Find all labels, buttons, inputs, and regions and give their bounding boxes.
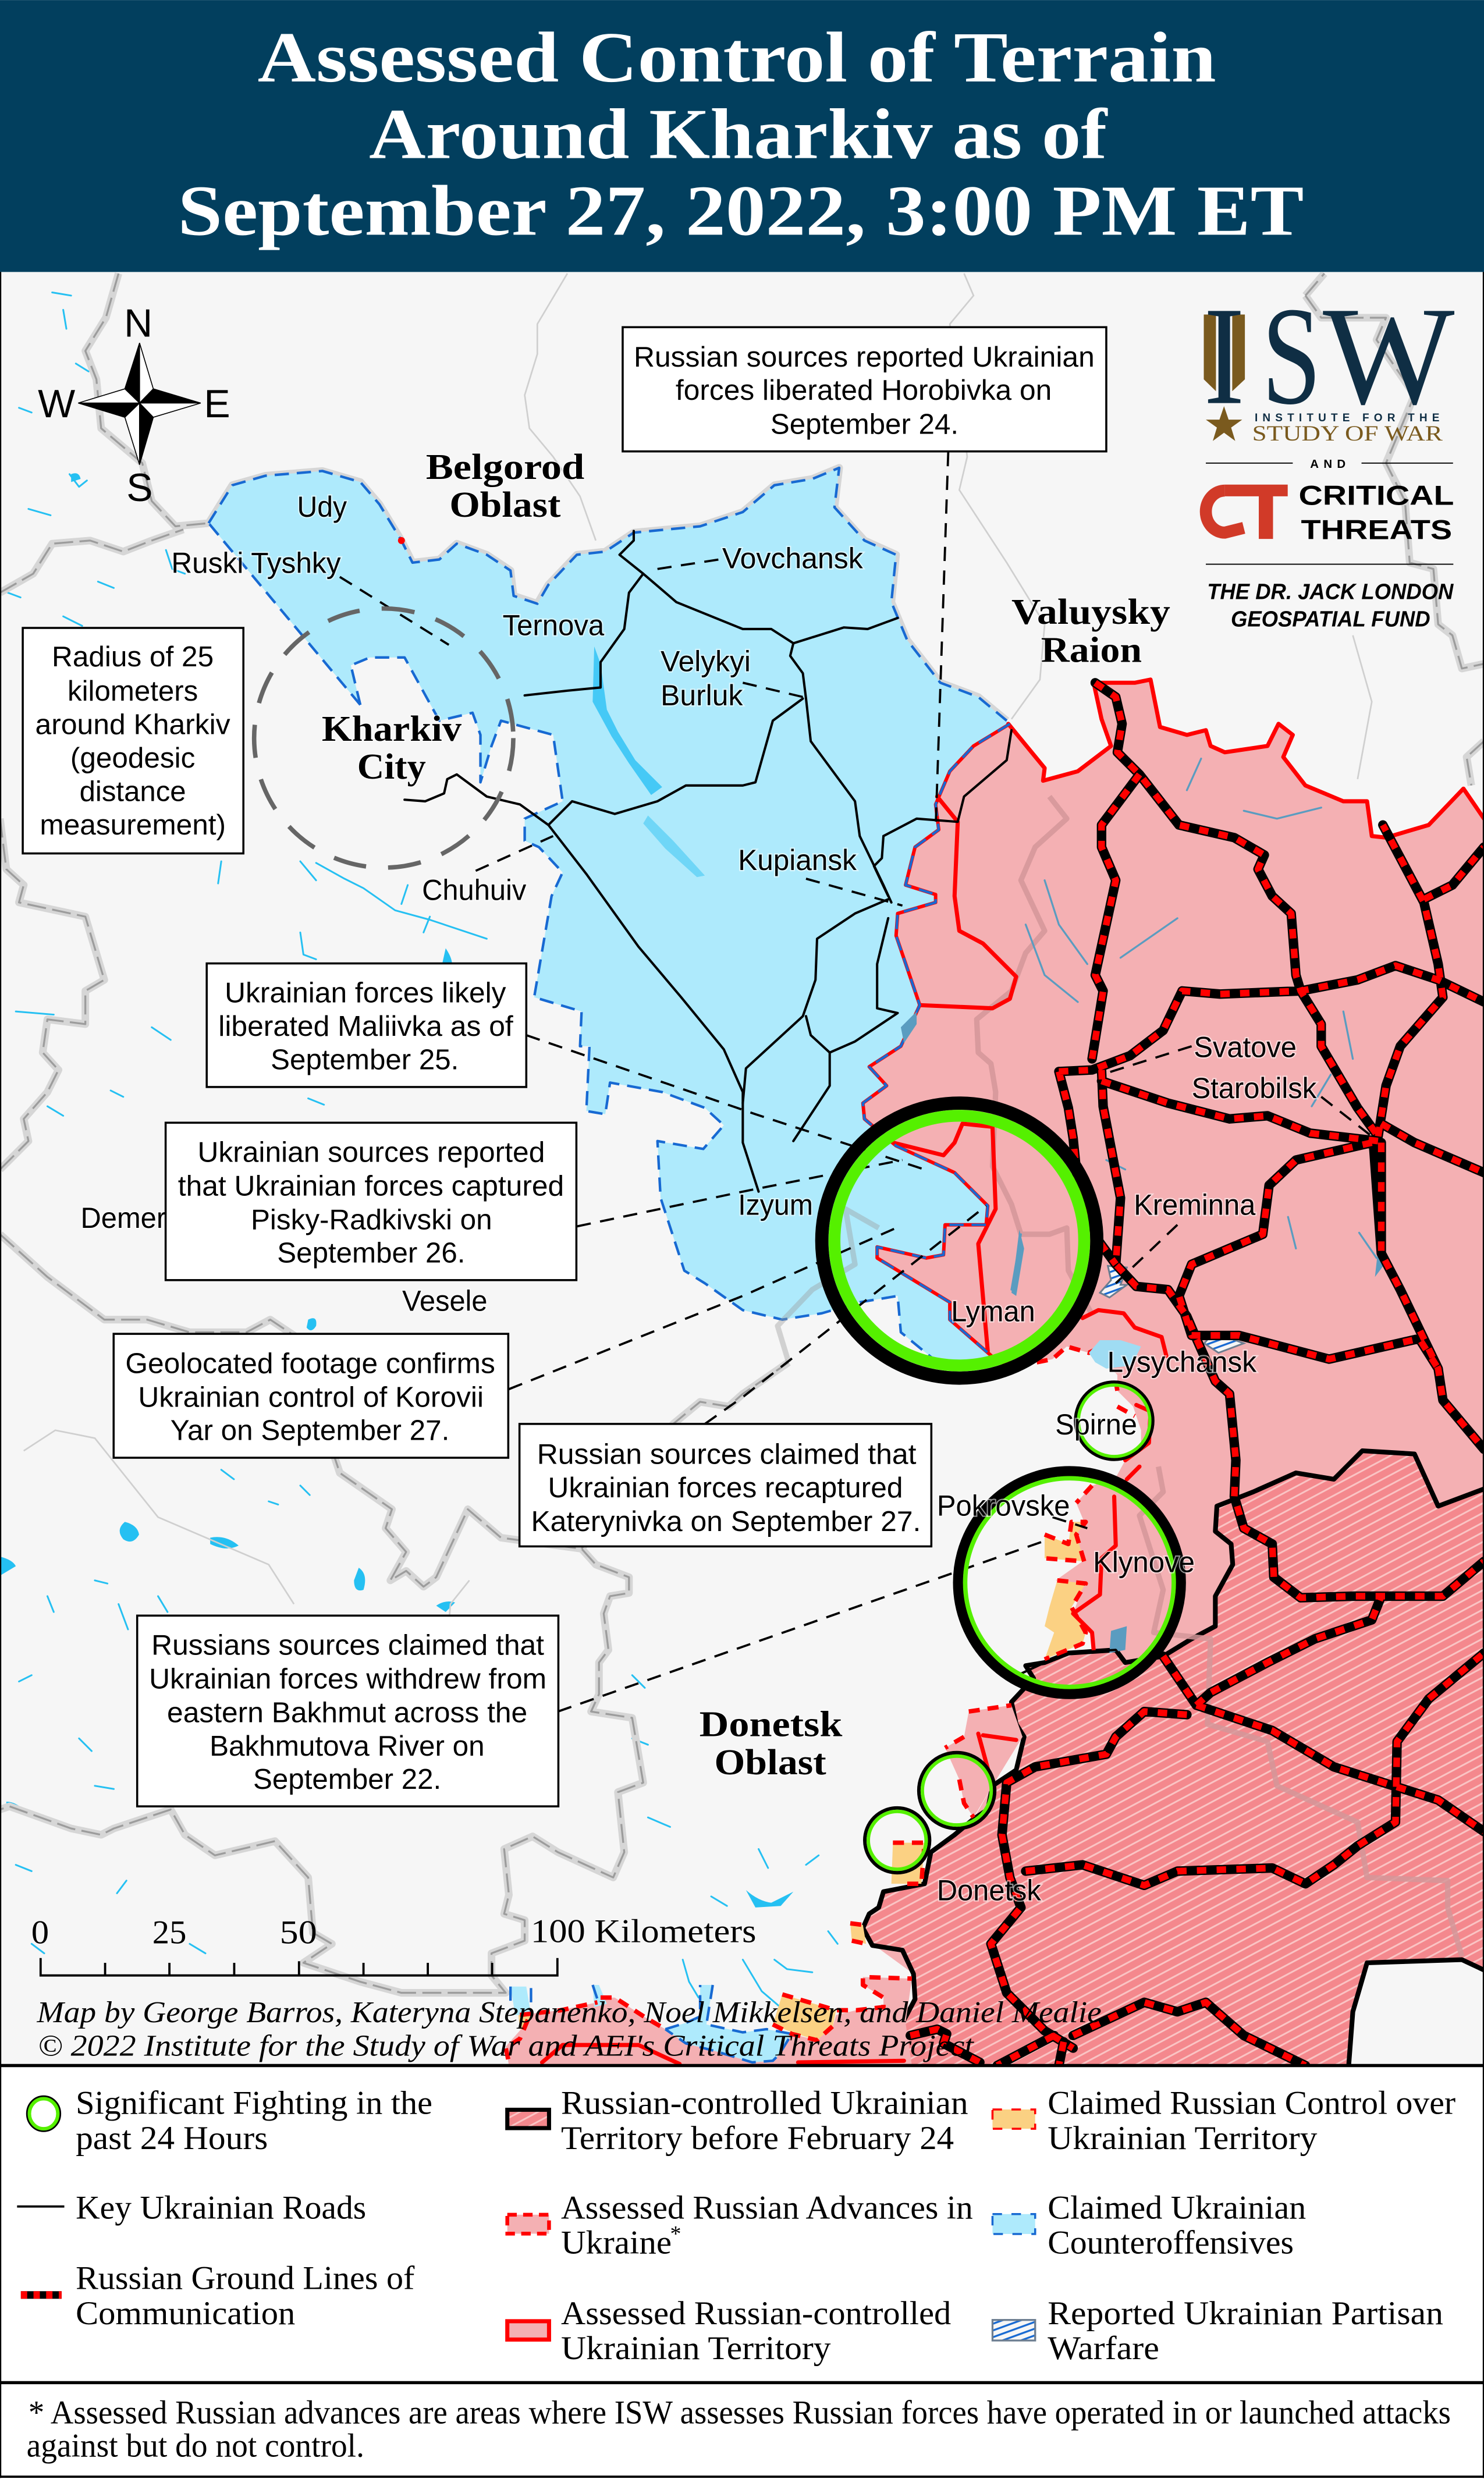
place labels: Starobilsk (1192, 1072, 1317, 1104)
callout: Katerynivka: Katerynivka on September 27. (531, 1506, 921, 1537)
callout: Katerynivka: Russian sources claimed that (537, 1439, 917, 1470)
Jack London fund text (1207, 580, 1454, 632)
callout: Bakhmut: September 22. (253, 1764, 441, 1795)
legend: assessed advances: Assessed Russian Advances in (561, 2189, 973, 2226)
title: Assessed Control of Terrain (258, 17, 1216, 97)
callout: radius around Kharkiv (23, 628, 243, 854)
place labels: Kreminna (1134, 1188, 1255, 1221)
Jack London fund text: GEOSPATIAL FUND (1231, 608, 1430, 632)
key Ukrainian roads (404, 531, 1126, 1675)
footnote: * Assessed Russian advances are areas where ISW assesses Russian forces have operated in or launched attacks (29, 2395, 1451, 2431)
place labels: Spirne (1055, 1408, 1137, 1441)
Critical Threats wordmark: THREATS (1301, 515, 1452, 546)
callout: Horobivka (623, 327, 1106, 452)
legend: claimed Ukrainian counteroffensives (992, 2189, 1306, 2261)
callout: Korovii Yar: Geolocated footage confirms (125, 1348, 495, 1380)
partisan warfare areas (1100, 1266, 1244, 1353)
title (178, 17, 1304, 250)
region labels: Oblast (449, 484, 561, 525)
legend: assessed advances (507, 2189, 973, 2261)
ISW wordmark: I (1203, 279, 1245, 434)
legend: key roads: Key Ukrainian Roads (76, 2189, 366, 2226)
logo: ISW and Critical Threats (1203, 279, 1454, 632)
callout: Pisky-Radkivski: September 26. (277, 1237, 465, 1269)
callout: Pisky-Radkivski (166, 1123, 576, 1280)
ISW wordmark (1203, 279, 1454, 445)
legend: significant fighting (27, 2084, 432, 2157)
callout: radius around Kharkiv: kilometers (68, 676, 198, 707)
ISW wordmark: STUDY OF WAR (1252, 421, 1443, 445)
AND divider: AND (1310, 458, 1345, 471)
compass rose: E (204, 382, 230, 426)
callout: Pisky-Radkivski: Pisky-Radkivski on (251, 1205, 492, 1236)
callout: Maliivka: Ukrainian forces likely (225, 978, 506, 1009)
significant fighting circles (822, 1103, 1181, 1873)
place labels: Kupiansk (738, 844, 857, 876)
place labels: Lysychansk (1107, 1345, 1257, 1378)
scale bar: 50 (280, 1914, 317, 1951)
legend: claimed Russian control: Ukrainian Territory (1048, 2120, 1318, 2157)
territory: assessed Russian-controlled (863, 680, 1484, 2065)
region labels: Valuysky (1011, 591, 1170, 632)
place labels: Klynove (1093, 1546, 1195, 1579)
callout: Maliivka (207, 964, 526, 1087)
white hole southeast (1348, 1960, 1484, 2065)
legend: claimed Ukrainian counteroffensives: Counteroffensives (1048, 2225, 1294, 2261)
legend: claimed Ukrainian counteroffensives: Claimed Ukrainian (1048, 2189, 1306, 2226)
title: Around Kharkiv as of (369, 94, 1108, 174)
legend: significant fighting: past 24 Hours (76, 2120, 268, 2157)
callout: Bakhmut (137, 1615, 558, 1806)
callout: Korovii Yar: Ukrainian control of Korovii (138, 1382, 484, 1413)
region labels: Donetsk (700, 1704, 843, 1745)
place labels (80, 491, 1317, 1907)
compass rose: W (38, 382, 75, 426)
callout: Pisky-Radkivski: that Ukrainian forces captured (178, 1171, 564, 1202)
title: September 27, 2022, 3:00 PM ET (178, 171, 1304, 250)
legend: assessed control: Assessed Russian-controlled (561, 2295, 951, 2332)
region labels: Kharkiv (322, 708, 462, 749)
place labels: Burluk (661, 679, 743, 712)
oblast border through contested area (777, 1209, 879, 1362)
callout: Bakhmut: Ukrainian forces withdrew from (149, 1664, 546, 1695)
internal borders under red (977, 797, 1462, 1956)
map credits: © 2022 Institute for the Study of War and AEI's Critical Threats Project (38, 2030, 975, 2063)
legend: significant fighting: Significant Fighting in the (76, 2084, 432, 2121)
legend: assessed control (507, 2295, 951, 2367)
legend: pre-February 24 territory: Territory before February 24 (561, 2120, 954, 2157)
place labels: Ruski Tyshky (171, 546, 341, 579)
rivers (592, 647, 1384, 1653)
legend: pre-February 24 territory (507, 2084, 968, 2157)
ISW wordmark: INSTITUTE FOR THE (1255, 412, 1439, 424)
place labels: Demer (80, 1202, 166, 1234)
region labels: Belgorod (426, 446, 585, 487)
region labels: City (357, 746, 426, 787)
callout: Bakhmut: Bakhmutova River on (210, 1731, 485, 1762)
place labels: Lyman (951, 1295, 1035, 1327)
region labels (322, 446, 1170, 1782)
place labels: Ternova (503, 609, 604, 641)
legend: partisan warfare (992, 2295, 1443, 2367)
callout: Katerynivka: Ukrainian forces recaptured (548, 1472, 903, 1504)
Critical Threats wordmark: CRITICAL (1298, 480, 1454, 511)
place labels: Svatove (1194, 1031, 1297, 1063)
callout: Maliivka: September 25. (271, 1045, 459, 1076)
place labels: Izyum (738, 1188, 813, 1221)
compass rose: N (124, 302, 152, 346)
territory: claimed Ukrainian counteroffensives (208, 468, 1010, 1369)
callout leader lines (340, 452, 1372, 1711)
legend: partisan warfare: Warfare (1048, 2330, 1159, 2367)
title banner (0, 0, 1484, 273)
legend: assessed advances: Ukraine (561, 2225, 672, 2261)
legend: pre-February 24 territory: Russian-controlled Ukrainian (561, 2084, 968, 2121)
callout: radius around Kharkiv: (geodesic (70, 743, 195, 774)
water features west (0, 293, 837, 2010)
legend: lines of communication: Russian Ground Lines of (76, 2260, 414, 2296)
Russian ground lines of communication (910, 683, 1484, 2065)
compass rose (38, 302, 230, 510)
place labels: Pokrovske (937, 1489, 1070, 1522)
place labels: Udy (297, 491, 347, 523)
scale bar: 25 (152, 1914, 186, 1951)
callout: radius around Kharkiv: Radius of 25 (52, 641, 214, 673)
callout: Pisky-Radkivski: Ukrainian sources reported (197, 1137, 545, 1169)
region labels: Raion (1041, 629, 1142, 670)
Critical Threats wordmark (1206, 480, 1454, 546)
callout: Horobivka: Russian sources reported Ukrainian (634, 342, 1095, 373)
ISW wordmark: S (1262, 279, 1321, 434)
map credits (36, 1996, 1102, 2063)
scale bar (31, 1913, 756, 1976)
callout: radius around Kharkiv: distance (80, 776, 186, 807)
callout: Bakhmut: eastern Bakhmut across the (167, 1697, 527, 1728)
Jack London fund text: THE DR. JACK LONDON (1207, 580, 1454, 604)
25 km radius circle around Kharkiv (254, 609, 513, 868)
panel: legend (0, 2065, 1484, 2383)
territory: claimed Ukrainian south (510, 1985, 792, 2062)
map credits: Map by George Barros, Kateryna Stepanenko, Noel Mikkelsen, and Daniel Mealie (36, 1996, 1102, 2029)
legend: claimed Russian control: Claimed Russian Control over (1048, 2084, 1455, 2121)
place labels: Vesele (402, 1284, 488, 1317)
place labels: Chuhuiv (422, 874, 526, 907)
footnote (0, 2384, 1484, 2479)
legend: lines of communication (21, 2260, 414, 2332)
territory: Russian-controlled before February 24 (863, 1451, 1484, 2073)
territory: claimed Russian control (519, 1522, 1086, 2040)
legend: assessed advances: * (670, 2222, 681, 2246)
legend: claimed Russian control (992, 2084, 1455, 2157)
legend: assessed control: Ukrainian Territory (561, 2330, 831, 2367)
territory: advances south (208, 468, 1484, 2065)
legend: lines of communication: Communication (76, 2295, 295, 2332)
place labels: Velykyi (661, 645, 751, 678)
scale bar: 0 (31, 1914, 49, 1951)
scale bar: 100 Kilometers (531, 1913, 756, 1950)
callout: Korovii Yar: Yar on September 27. (171, 1415, 449, 1446)
footnote: against but do not control. (27, 2428, 364, 2464)
oblast and international borders (0, 274, 1484, 1993)
region labels: Oblast (714, 1742, 826, 1782)
compass rose: S (126, 466, 153, 510)
panel: map (0, 272, 1484, 2073)
ISW wordmark: W (1323, 279, 1454, 434)
callout: Horobivka: September 24. (771, 409, 958, 440)
callout: radius around Kharkiv: measurement) (40, 809, 226, 841)
place labels: Donetsk (937, 1874, 1042, 1907)
callout: Maliivka: liberated Maliivka as of (218, 1011, 513, 1042)
callout: radius around Kharkiv: around Kharkiv (35, 709, 230, 741)
callout: Horobivka: forces liberated Horobivka on (676, 375, 1052, 406)
legend: partisan warfare: Reported Ukrainian Partisan (1048, 2295, 1443, 2332)
place labels: Vovchansk (722, 542, 864, 575)
callout: Korovii Yar (113, 1334, 508, 1458)
callout: Bakhmut: Russians sources claimed that (151, 1629, 544, 1661)
callout: Katerynivka (520, 1424, 931, 1546)
